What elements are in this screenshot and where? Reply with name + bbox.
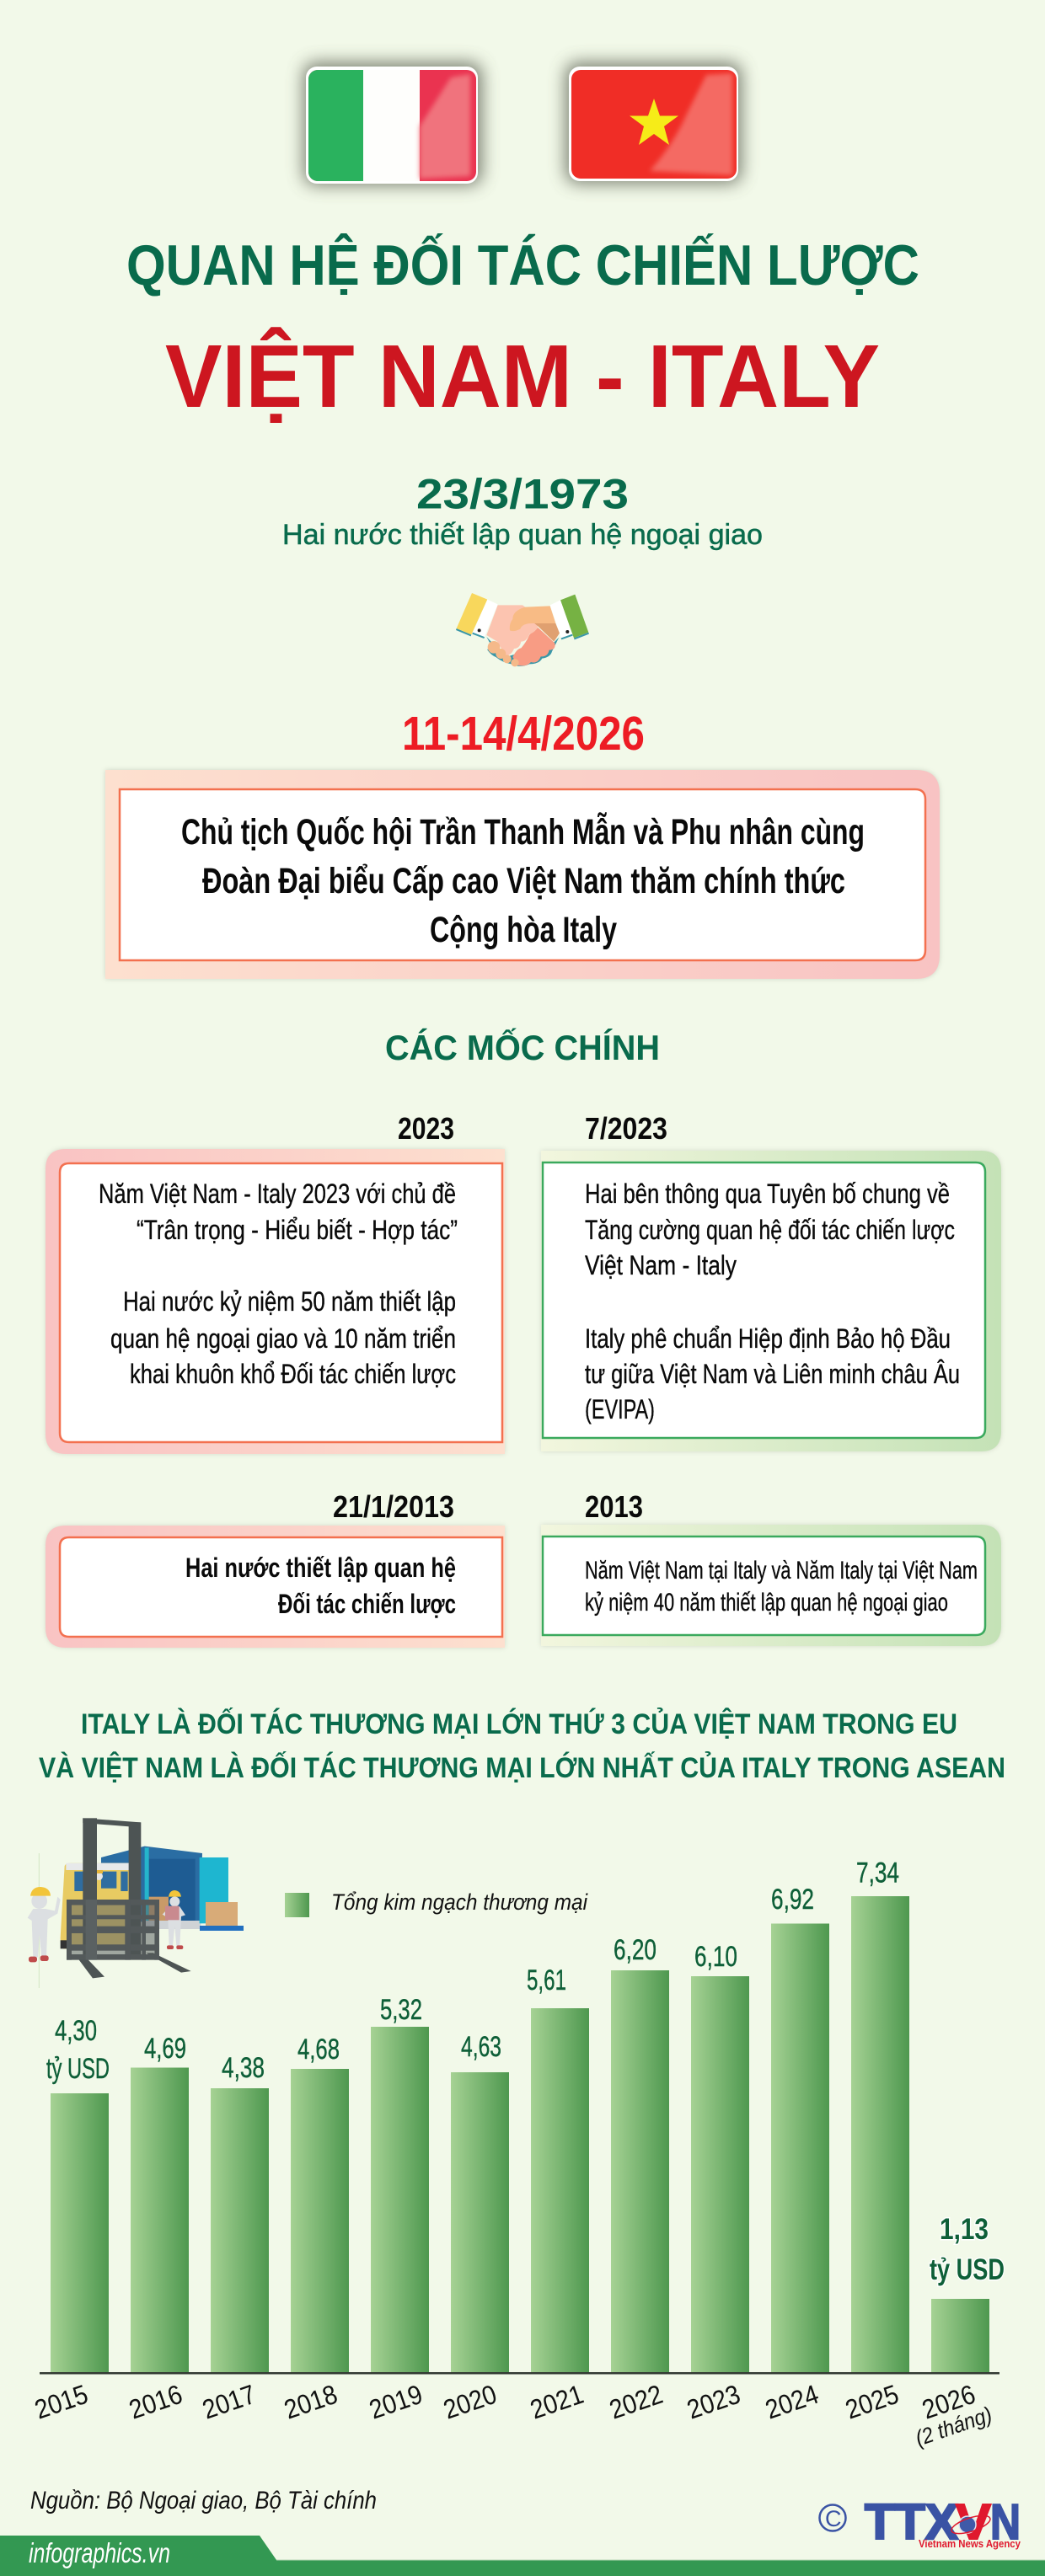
text: visit description: Cộng hòa Italy bbox=[430, 910, 617, 950]
footer bar bbox=[0, 2536, 1045, 2576]
text: 7/2023 description: Hai bên thông qua Tuyên bố chung về bbox=[585, 1178, 950, 1209]
logo: TTXVN bbox=[819, 2494, 1021, 2550]
heading: key milestones: CÁC MỐC CHÍNH bbox=[385, 1027, 660, 1067]
text: 7/2023 description: (EVIPA) bbox=[585, 1394, 655, 1424]
value labels: 7,34 bbox=[856, 1857, 899, 1889]
value labels: 4,30 bbox=[55, 2015, 97, 2047]
text: visit description: Đoàn Đại biểu Cấp cao Việt Nam thăm chính thức bbox=[202, 861, 845, 901]
panel: 7/2023 milestone bbox=[541, 1151, 1001, 1451]
logo: TTXVN: N bbox=[990, 2494, 1021, 2550]
year labels: 2020 bbox=[440, 2379, 501, 2425]
icon: handshake bbox=[456, 593, 589, 666]
date: 23/3/1973: 23/3/1973 bbox=[416, 470, 629, 517]
illustration: cargo boxes bbox=[200, 1902, 244, 1931]
logo: TTXVN: C bbox=[825, 2506, 841, 2531]
source: Nguồn: Bộ Ngoại giao, Bộ Tài chính bbox=[30, 2487, 377, 2515]
text: visit description bbox=[181, 811, 865, 950]
text: 21/1/2013 description bbox=[185, 1553, 456, 1619]
label: 2013: 2013 bbox=[585, 1489, 643, 1524]
text: 2023 description: khai khuôn khổ Đối tác chiến lược bbox=[130, 1359, 456, 1389]
logo: TTXVN: V bbox=[956, 2494, 991, 2550]
text: 2023 description: “Trân trọng - Hiểu biết - Hợp tác” bbox=[137, 1215, 458, 1245]
label: 2023: 2023 bbox=[398, 1111, 454, 1146]
value labels: 4,38 bbox=[222, 2052, 265, 2084]
value labels bbox=[46, 1857, 899, 2085]
year labels: 2017 bbox=[199, 2379, 260, 2425]
title: QUAN HỆ ĐỐI TÁC CHIẾN LƯỢC bbox=[126, 232, 919, 297]
label: 7/2023: 7/2023 bbox=[585, 1111, 667, 1146]
logo: TTXVN: Vietnam News Agency bbox=[919, 2538, 1021, 2550]
year labels: 2019 bbox=[366, 2379, 426, 2425]
value labels: 4,68 bbox=[297, 2034, 340, 2066]
year labels: 2018 bbox=[281, 2379, 341, 2425]
panel: 2013 milestone bbox=[541, 1525, 1001, 1646]
heading: Việt Nam - Italy: VIỆT NAM - ITALY bbox=[165, 327, 880, 426]
year labels: 2016 bbox=[126, 2379, 186, 2425]
value labels: 4,69 bbox=[144, 2033, 186, 2065]
text: 2023 description: quan hệ ngoại giao và 10 năm triển bbox=[110, 1323, 456, 1354]
heading: trade partner: ITALY LÀ ĐỐI TÁC THƯƠNG MẠI LỚN THỨ 3 CỦA VIỆT NAM TRONG EU bbox=[81, 1708, 957, 1740]
value labels: 4,63 bbox=[461, 2031, 501, 2063]
date: 11-14/4/2026: 11-14/4/2026 bbox=[402, 707, 645, 761]
text: 21/1/2013 description: Đối tác chiến lược bbox=[278, 1589, 456, 1619]
text: 7/2023 description: Italy phê chuẩn Hiệp định Bảo hộ Đầu bbox=[585, 1323, 951, 1354]
value labels: 6,10 bbox=[694, 1941, 737, 1973]
text: 7/2023 description: tư giữa Việt Nam và Liên minh châu Âu bbox=[585, 1359, 960, 1389]
value labels: 5,61 bbox=[527, 1964, 566, 1996]
year labels: 2023 bbox=[683, 2379, 744, 2425]
year labels: 2024 bbox=[762, 2379, 823, 2425]
label: 21/1/2013: 21/1/2013 bbox=[333, 1489, 454, 1524]
year labels: 2021 bbox=[527, 2379, 587, 2425]
text: 2023 description: Hai nước kỷ niệm 50 năm thiết lập bbox=[123, 1286, 456, 1317]
highlighted value: 2026 bbox=[930, 2213, 1005, 2286]
year labels: 2026 bbox=[919, 2379, 979, 2425]
icon: Italy flag bbox=[303, 62, 482, 185]
value labels: 5,32 bbox=[380, 1994, 422, 2026]
highlighted value: 2026: 1,13 bbox=[940, 2213, 989, 2246]
text: 2023 description bbox=[99, 1178, 458, 1389]
panel: 21/1/2013 milestone bbox=[46, 1526, 505, 1648]
year labels: 2025 bbox=[842, 2379, 903, 2425]
icon: Vietnam flag bbox=[565, 62, 742, 184]
year labels: 2022 bbox=[606, 2379, 667, 2425]
value labels: 6,20 bbox=[614, 1934, 656, 1966]
heading: trade partner bbox=[39, 1708, 1005, 1784]
panel: official visit bbox=[105, 770, 940, 979]
text: 7/2023 description: Việt Nam - Italy bbox=[585, 1250, 737, 1280]
year labels bbox=[31, 2379, 995, 2451]
website: infographics.vn bbox=[29, 2537, 170, 2568]
legend: Tổng kim ngạch thương mại bbox=[331, 1889, 588, 1915]
year labels: 2015 bbox=[31, 2379, 92, 2425]
illustration: forklift, container and workers bbox=[28, 1818, 228, 1988]
text: 2023 description: Năm Việt Nam - Italy 2023 với chủ đề bbox=[99, 1178, 456, 1209]
highlighted value: 2026: tỷ USD bbox=[930, 2253, 1005, 2286]
value labels: 6,92 bbox=[771, 1884, 814, 1916]
value labels: tỷ USD bbox=[46, 2053, 110, 2085]
bars bbox=[51, 1896, 989, 2373]
logo: TTXVN: TTX bbox=[865, 2494, 958, 2550]
text: 2013 description bbox=[585, 1557, 978, 1617]
text: establishment of diplomatic relations: Hai nước thiết lập quan hệ ngoại giao bbox=[282, 519, 763, 551]
bar chart: total trade turnover bbox=[31, 1857, 1005, 2451]
text: 7/2023 description bbox=[585, 1178, 960, 1424]
text: 21/1/2013 description: Hai nước thiết lập quan hệ bbox=[185, 1553, 456, 1583]
panel: 2023 milestone bbox=[46, 1149, 505, 1454]
year labels: (2 tháng) bbox=[912, 2402, 995, 2451]
